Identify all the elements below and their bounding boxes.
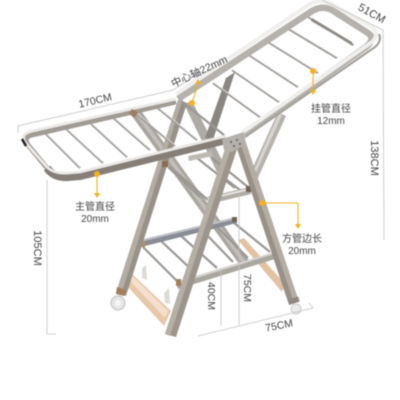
callout: center axis: 中心轴22mm bbox=[169, 53, 230, 90]
label: 138CM: 138CM bbox=[368, 140, 380, 176]
caster: right wheel bbox=[291, 304, 301, 314]
rear wood stretcher bbox=[238, 238, 285, 292]
callout: square tube side: 方管边长 bbox=[282, 232, 322, 245]
dimension lines bbox=[18, 0, 384, 336]
callout: square tube side bbox=[259, 200, 322, 257]
label: 105CM: 105CM bbox=[31, 230, 43, 266]
callout: center axis bbox=[169, 53, 230, 106]
callout: square tube side: 20mm bbox=[288, 246, 316, 257]
hinge plate bbox=[222, 132, 246, 152]
front wood stretcher bbox=[127, 265, 171, 326]
front right leg bbox=[165, 143, 238, 337]
rear right legs bbox=[235, 140, 300, 305]
rear legs and frame bbox=[129, 72, 286, 268]
label: 51CM: 51CM bbox=[356, 2, 387, 26]
right wing drying frame bbox=[176, 1, 380, 137]
label: 170CM: 170CM bbox=[77, 91, 113, 111]
label: 75CM width: 75CM bbox=[264, 317, 294, 335]
callout: hanging tube diameter: 12mm bbox=[317, 116, 345, 127]
lower shelf bbox=[139, 217, 275, 289]
caster: left wheel bbox=[111, 296, 125, 310]
callout: main tube diameter: 主管直径 bbox=[75, 200, 115, 213]
label: 75CM height: 75CM bbox=[241, 274, 253, 302]
callout: main tube diameter bbox=[75, 171, 115, 225]
upper shelf bbox=[168, 151, 252, 204]
callout: hanging tube diameter bbox=[310, 68, 351, 127]
callout: hanging tube diameter: 挂管直径 bbox=[311, 102, 351, 115]
callout: main tube diameter: 20mm bbox=[81, 214, 109, 225]
left wing drying frame bbox=[22, 99, 226, 177]
front left leg bbox=[116, 100, 187, 296]
label: 40CM: 40CM bbox=[205, 282, 217, 310]
